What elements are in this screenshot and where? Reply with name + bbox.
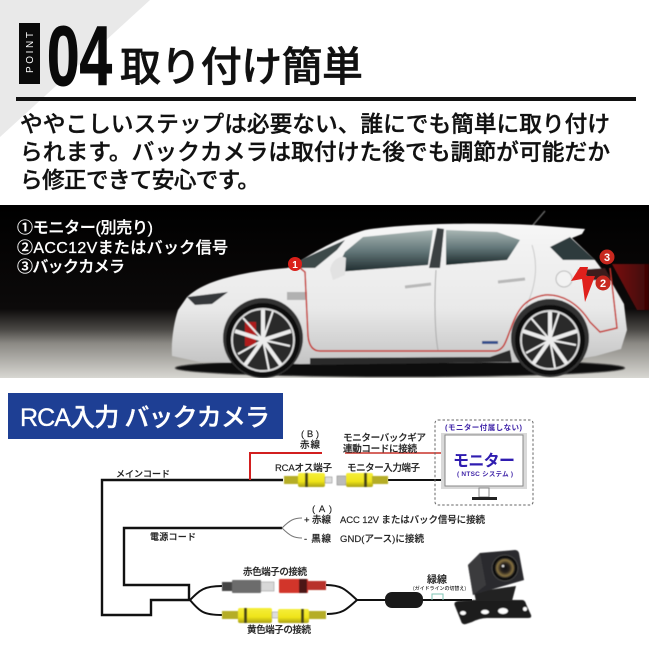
emblem [287,292,307,300]
diagram labels: (A) [312,504,332,515]
tail light [577,268,612,281]
diagram labels: 連動コードに接続 [343,443,417,455]
rear wheel [511,299,589,377]
diagram labels: - 黒線 [304,533,331,545]
power cord fork [282,518,302,538]
red cord B [250,453,322,480]
marker 2 [596,276,610,290]
diagram labels: 赤色端子の接続 [243,566,307,578]
mirror [330,257,346,280]
red cord to monitor [345,452,442,454]
photo legend: ③バックカメラ [17,258,125,276]
body text: ら修正できて安心です。 [20,167,260,193]
switch box [385,592,423,608]
diagram labels: + 赤線 [304,514,331,526]
monitor [435,420,533,505]
photo legend: ①モニター(別売り) [17,219,153,237]
car illustration [172,211,627,378]
body text: られます。バックカメラは取付けた後でも調節が可能だか [20,139,610,165]
panel: car photo [0,205,649,378]
banner: RCA input [8,393,283,439]
diagram labels: RCAオス端子 [275,462,332,474]
header rule [16,97,636,101]
red camera beam [612,264,649,310]
door pillars and seams [429,228,444,268]
monitor: モニター [453,452,515,470]
power cord [124,528,282,600]
banner: RCA input: RCA入力 バックカメラ [20,404,270,432]
diagram labels: 黄色端子の接続 [247,624,311,636]
connector: monitor input [337,473,388,487]
front wheel [223,298,303,378]
connector: RCA male [284,473,332,487]
diagram labels: 電源コード [150,531,196,542]
photo legend: ②ACC12Vまたはバック信号 [17,239,228,257]
red wiring route [295,264,617,351]
side skirt [310,350,512,365]
badge: POINT: POINT [25,32,36,73]
wiring diagram [102,420,533,636]
connector: red [279,579,326,593]
video cord to monitor [388,479,442,481]
monitor: ( NTSC システム ) [457,470,513,478]
icon: rear camera [454,550,531,624]
diagram labels: 緑線 [427,573,447,586]
main cord [102,480,283,615]
marker 3: 3 [604,252,610,264]
marker 2: 2 [600,278,606,290]
connector: gray [222,580,274,593]
body text [20,111,610,193]
body text: ややこしいステップは必要ない、誰にでも簡単に取り付け [20,111,610,137]
diagram labels: (ガイドラインの切替え) [413,585,466,592]
photo legend [17,219,228,276]
left fork [190,586,222,615]
marker 1 [288,257,302,271]
badge: POINT [19,23,40,84]
title: 取り付け簡単 [120,44,363,90]
antenna [533,211,545,225]
diagram labels: モニター入力端子 [347,462,420,474]
diagram labels: 赤線 [300,439,320,451]
lightning bolt [571,267,595,302]
teal switch wire [432,594,443,600]
connector: yellow right [278,609,326,623]
diagram labels: モニターバックギア [343,432,426,444]
header: grey corner triangle [0,0,150,137]
right fork [326,585,385,614]
diagram labels [116,429,485,636]
headlight [187,292,228,305]
diagram labels: メインコード [116,469,170,479]
monitor: (モニター付属しない) [445,422,522,432]
marker 3 [600,250,614,264]
connector: yellow left [222,608,279,623]
camera cable [423,599,472,601]
number 04: 04 [47,9,112,103]
side windows [335,230,433,272]
diagram labels: (B) [301,429,319,440]
diagram labels: ACC 12V またはバック信号に接続 [340,514,485,526]
marker 1: 1 [292,260,298,271]
diagram labels: GND(アース)に接続 [340,533,424,545]
